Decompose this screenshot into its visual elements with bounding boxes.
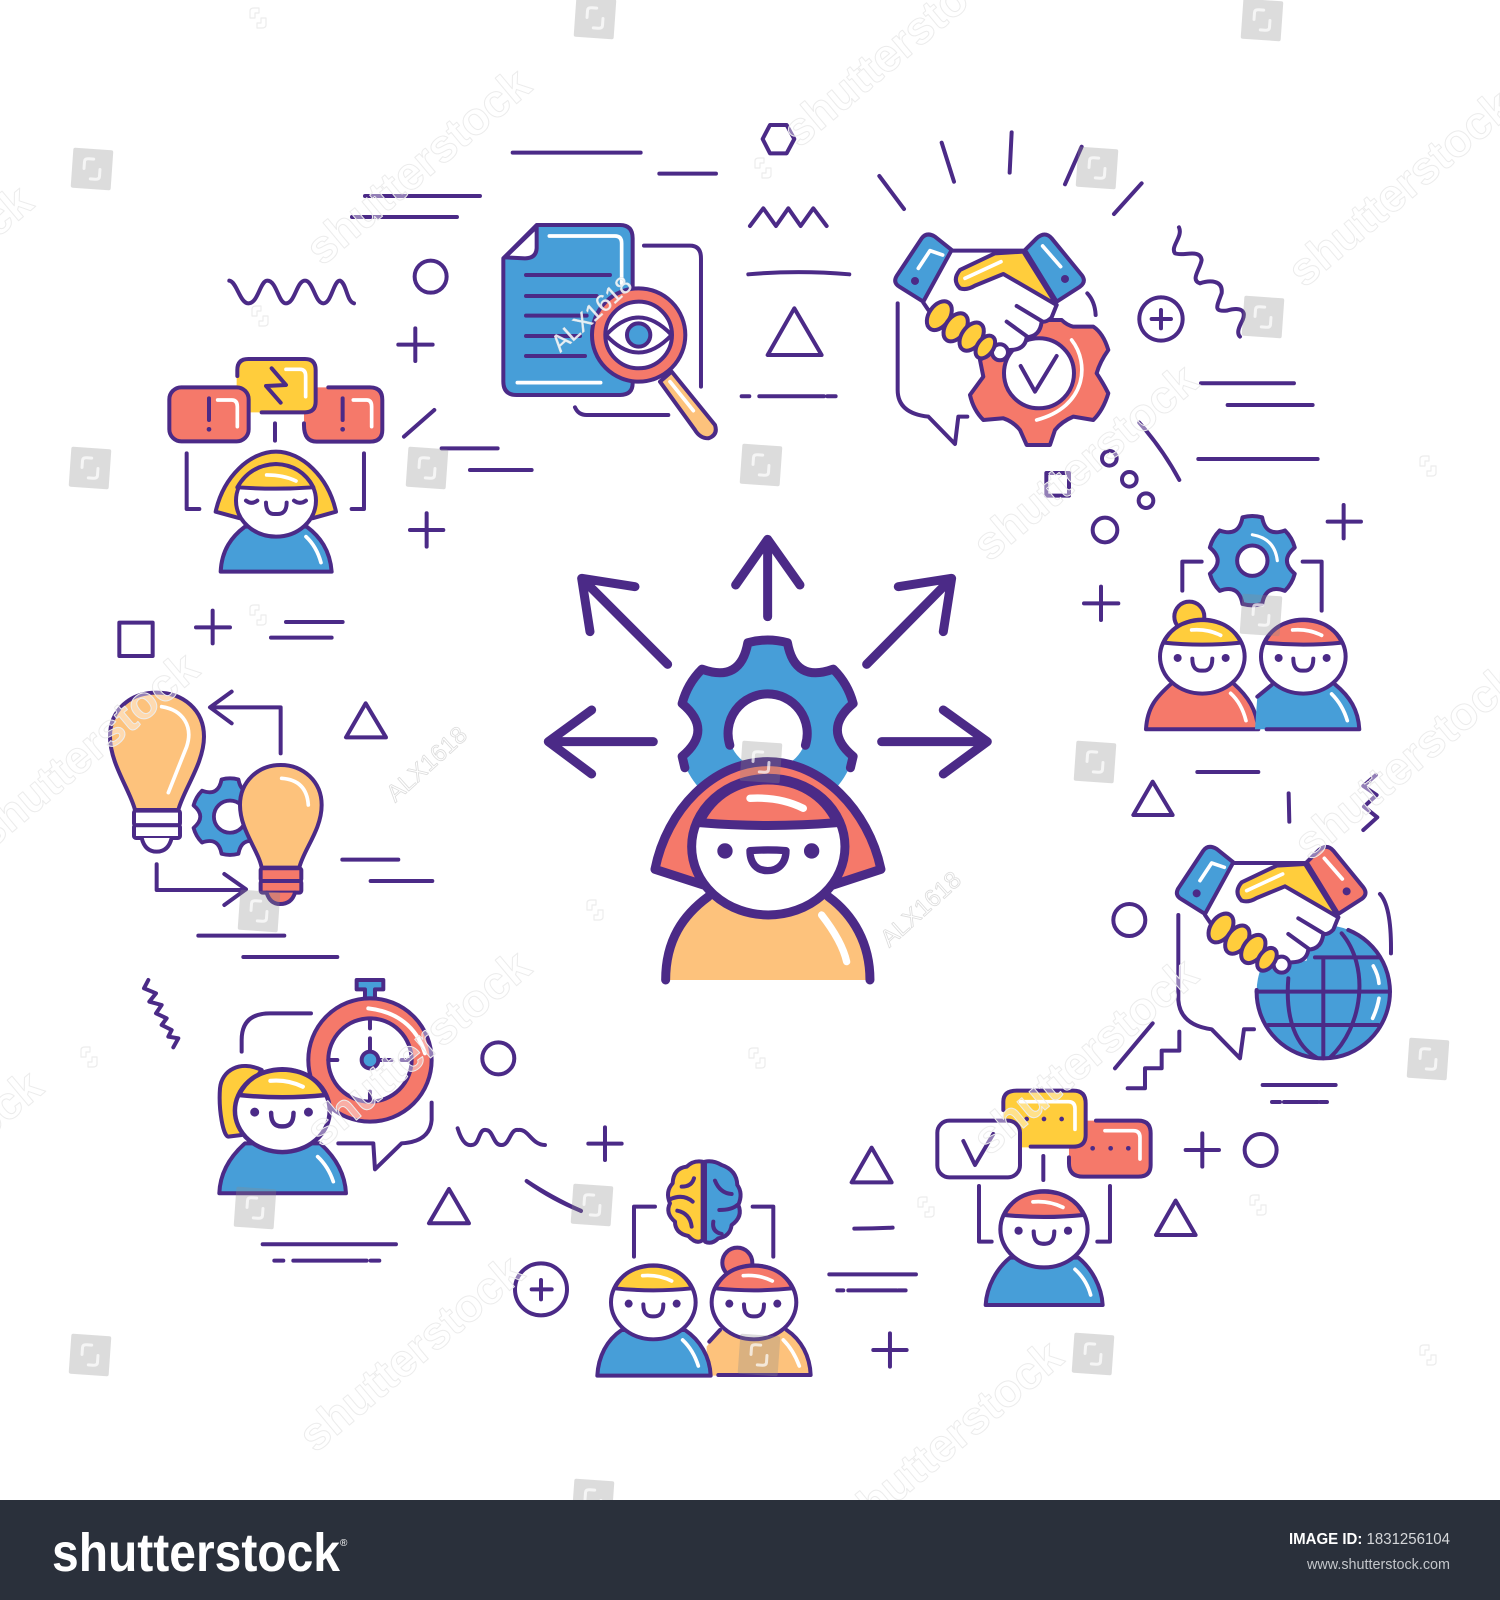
watermark text: shutterstock: [962, 353, 1207, 570]
text lines: [1139, 383, 1318, 480]
clasped hands: [1177, 847, 1365, 974]
blue gear: [1210, 516, 1295, 605]
decorations: [229, 196, 532, 547]
brackets: [1182, 562, 1322, 611]
right cuff: [1025, 234, 1084, 302]
speech bubble outline: [242, 1013, 432, 1169]
icon: handshake with globe: [1113, 772, 1391, 1102]
globe: [1257, 925, 1390, 1058]
small bulb: [240, 765, 322, 904]
watermark text: shutterstock: [962, 947, 1207, 1164]
small blue gear: [194, 778, 266, 855]
zigzag: [144, 980, 178, 1047]
right cuff: [1307, 847, 1365, 914]
icon: person with warning bubbles: [169, 196, 532, 572]
body: [666, 897, 870, 980]
footer bar: [0, 1500, 1500, 1600]
decorations: [263, 1042, 581, 1261]
squiggle: [1174, 227, 1244, 337]
footer logo: shutterstock: [52, 1523, 341, 1583]
yellow bubble with lightning: [237, 359, 316, 412]
watermark text: shutterstock: [295, 939, 540, 1156]
connector brackets: [979, 1156, 1110, 1242]
person with bun: [1146, 602, 1258, 729]
icon: person with stopwatch: [144, 980, 581, 1261]
image id: IMAGE ID: 1831256104: [1289, 1531, 1450, 1548]
watermark text: shutterstock: [288, 1244, 533, 1461]
icon: team with gear: [1046, 451, 1361, 729]
watermark text: ALX1618: [875, 866, 967, 953]
plus in circle: [1139, 297, 1183, 341]
hair: [655, 762, 881, 885]
person blue body: [1255, 620, 1359, 729]
document sheet: [503, 225, 633, 395]
stopwatch: [308, 980, 432, 1122]
icon: two people with brain: [515, 1127, 916, 1376]
person blue body: [597, 1265, 711, 1376]
speech bubble outline: [898, 293, 1096, 444]
person with hair: [216, 452, 336, 572]
decorations: [515, 1127, 916, 1367]
icon: handshake with gear: [879, 132, 1318, 480]
decorations: [1156, 1133, 1277, 1235]
watermark text: ALX1618: [381, 721, 473, 808]
watermark text: shutterstock: [295, 57, 540, 274]
brackets: [634, 1207, 773, 1257]
central figure with arrows: [548, 539, 987, 980]
brain: [668, 1161, 741, 1243]
decorations: [119, 611, 432, 957]
watermark text: ALX1618: [546, 271, 638, 358]
gear behind head: [682, 640, 853, 820]
registered mark: ®: [340, 1538, 348, 1549]
watermark text: shutterstock: [827, 1329, 1072, 1546]
arrows radiating from the head: [548, 539, 987, 774]
icon: light bulbs and gear exchange: [110, 611, 432, 957]
connector brackets: [575, 246, 701, 415]
large bulb: [110, 693, 204, 852]
icon: document with magnifier: [503, 125, 849, 438]
yellow bubble: [1003, 1091, 1086, 1147]
person: [986, 1191, 1103, 1305]
dots and circle decorations: [1046, 451, 1361, 620]
decorations: [1113, 772, 1377, 1102]
face: [692, 778, 845, 915]
cycle arrows: [157, 692, 281, 905]
rays above handshake: [879, 132, 1142, 214]
speech bubble outline: [1178, 894, 1391, 1058]
white check bubble: [937, 1121, 1020, 1177]
clasped hands: [895, 234, 1084, 362]
coral bubble right: [304, 387, 382, 442]
icon: person with chat bubbles and check: [937, 1091, 1277, 1305]
site url: www.shutterstock.com: [1306, 1556, 1450, 1573]
coral bubble: [1069, 1121, 1151, 1177]
person with bun, orange body: [707, 1248, 812, 1376]
coral gear with check: [970, 320, 1108, 445]
magnifier with eye: [592, 288, 716, 438]
connector brackets: [187, 423, 364, 509]
coral bubble left: [169, 387, 249, 441]
decorative marks around document: [513, 125, 849, 396]
person with ponytail: [219, 1066, 346, 1193]
